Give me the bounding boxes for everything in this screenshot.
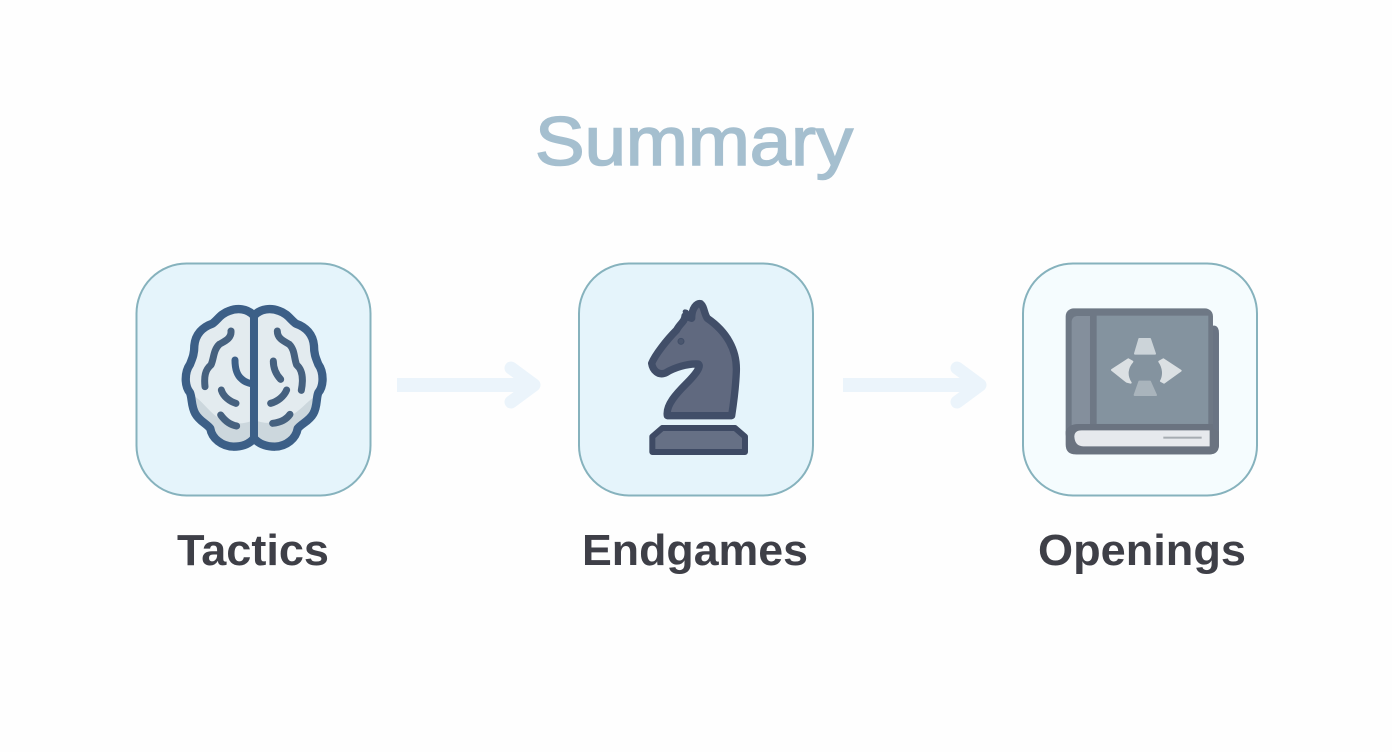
icon: brain <box>186 309 323 447</box>
panel: endgames <box>579 264 813 496</box>
icon: opening book <box>1066 308 1219 454</box>
icon: chess arrows emblem <box>1112 339 1181 395</box>
panel: tactics <box>136 264 370 496</box>
label: endgames: Endgames <box>582 526 808 575</box>
icon: chess knight <box>652 304 745 452</box>
arrow: tactics to endgames <box>397 368 534 402</box>
title: Summary <box>535 103 854 180</box>
panel: openings <box>1023 264 1257 496</box>
arrow: endgames to openings <box>843 368 980 402</box>
label: tactics: Tactics <box>177 526 329 575</box>
label: openings: Openings <box>1038 526 1246 575</box>
